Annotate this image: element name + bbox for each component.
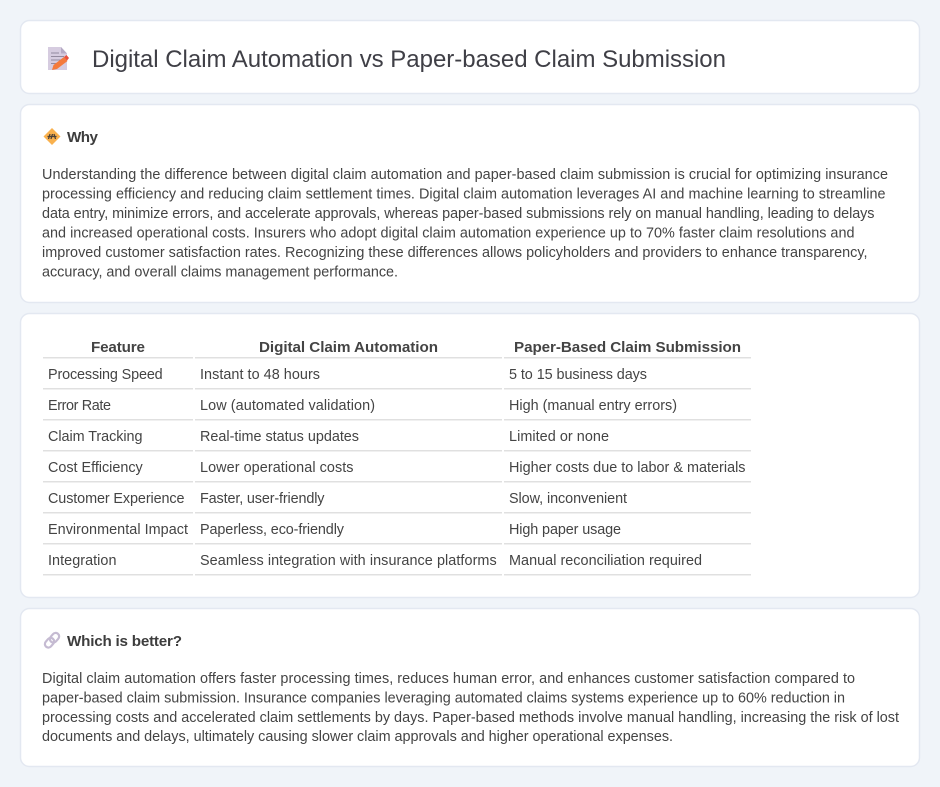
text block: why paragraph: data entry, minimize errors, and accelerate approvals, whereas paper-based submissions rely on manual handling, leading to delays bbox=[42, 206, 874, 222]
row: error rate: High (manual entry errors) bbox=[509, 398, 677, 414]
row: processing speed: Instant to 48 hours bbox=[200, 367, 320, 383]
row: claim tracking: Claim Tracking bbox=[48, 429, 142, 445]
row: error rate: Low (automated validation) bbox=[200, 398, 375, 414]
title: Digital Claim Automation vs Paper-based Claim Submission bbox=[92, 46, 726, 73]
text block: why paragraph: processing efficiency and reducing claim settlement times. Digital claim automation leverages AI and machine learning to streamline bbox=[42, 186, 886, 202]
row: error rate bbox=[43, 398, 751, 420]
row: error rate: Error Rate bbox=[48, 398, 111, 414]
row: processing speed bbox=[43, 367, 751, 390]
table header bbox=[43, 339, 751, 358]
panel: comparison table bbox=[20, 314, 920, 598]
row: cost efficiency: Higher costs due to labor & materials bbox=[509, 460, 746, 476]
panel: which is better bbox=[20, 608, 920, 766]
row: cost efficiency bbox=[43, 460, 751, 482]
panel: header bbox=[20, 20, 920, 94]
panel: why bbox=[20, 104, 920, 302]
text block: which is better paragraph: documents and delays, ultimately causing slower claim approvals and higher operational expenses. bbox=[42, 729, 673, 745]
row: customer experience bbox=[43, 491, 751, 514]
table header: Feature bbox=[91, 339, 145, 356]
row: claim tracking: Real-time status updates bbox=[200, 429, 359, 445]
row: integration: Integration bbox=[48, 553, 116, 569]
row: integration: Seamless integration with insurance platforms bbox=[200, 553, 497, 569]
icon: memo with pencil bbox=[48, 47, 69, 70]
text block: why paragraph bbox=[42, 167, 888, 280]
row: customer experience: Slow, inconvenient bbox=[509, 491, 627, 507]
text block: why paragraph: and increased operational costs. Insurers who adopt digital claim automation experience up to 70% faster claim resolutions and bbox=[42, 226, 854, 242]
text block: why paragraph: accuracy, and overall claims management performance. bbox=[42, 264, 398, 280]
row: integration bbox=[43, 553, 751, 576]
text block: which is better paragraph: paper-based claim submission. Insurance companies leveraging automated claims systems experience up to 60% reduction in bbox=[42, 690, 845, 706]
row: processing speed: 5 to 15 business days bbox=[509, 367, 647, 383]
icon: warning diamond bbox=[44, 128, 60, 145]
table header: Paper-Based Claim Submission bbox=[514, 339, 741, 356]
row: cost efficiency: Cost Efficiency bbox=[48, 460, 143, 476]
row: claim tracking: Limited or none bbox=[509, 429, 609, 445]
row: cost efficiency: Lower operational costs bbox=[200, 460, 354, 476]
icon: link bbox=[43, 631, 61, 649]
row: customer experience: Faster, user-friendly bbox=[200, 491, 325, 507]
row: environmental impact: Environmental Impact bbox=[48, 522, 188, 538]
row: environmental impact bbox=[43, 522, 751, 544]
text block: which is better paragraph: Digital claim automation offers faster processing times, reduces human error, and enhances customer satisfaction compared to bbox=[42, 671, 855, 687]
text block: which is better paragraph bbox=[42, 671, 899, 745]
row: processing speed: Processing Speed bbox=[48, 367, 163, 383]
row: claim tracking bbox=[43, 429, 751, 452]
row: integration: Manual reconciliation required bbox=[509, 553, 702, 569]
text block: why paragraph: Understanding the difference between digital claim automation and paper-based claim submission is crucial for optimizing insurance bbox=[42, 167, 888, 183]
text block: which is better paragraph: processing costs and accelerated claim settlements by days. Paper-based methods involve manual handling, increasing the risk of lost bbox=[42, 710, 899, 726]
heading: which is better: Which is better? bbox=[67, 633, 182, 650]
heading: why: Why bbox=[67, 129, 99, 146]
row: environmental impact: High paper usage bbox=[509, 522, 621, 538]
table header: Digital Claim Automation bbox=[259, 339, 438, 356]
row: environmental impact: Paperless, eco-friendly bbox=[200, 522, 345, 538]
text block: why paragraph: improved customer satisfaction rates. Recognizing these differences allows policyholders and providers to enhance transparency, bbox=[42, 245, 868, 261]
row: customer experience: Customer Experience bbox=[48, 491, 184, 507]
